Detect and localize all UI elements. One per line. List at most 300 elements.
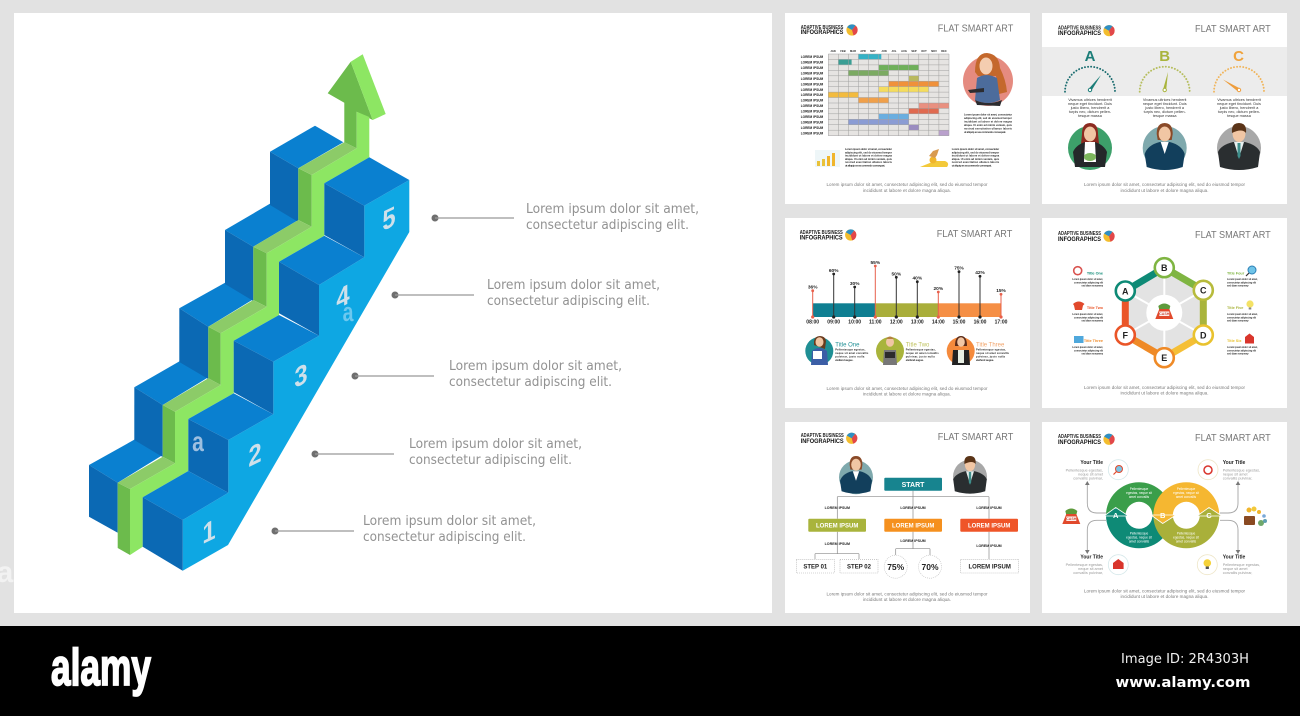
timeline chart: 50% <box>891 271 902 277</box>
title one text: pulvinar, justo nulla <box>835 354 865 358</box>
timeline chart: 09:00 <box>827 320 840 326</box>
item: title three: Title Three <box>1084 339 1103 343</box>
item: title four: Lorem ipsum dolor sit amet, <box>1227 278 1258 281</box>
title two text: neque sit amet convallis <box>906 351 939 355</box>
item: bottom right <box>1197 554 1260 575</box>
gantt chart: JUN <box>881 49 887 53</box>
step numbers: 2 <box>248 435 262 473</box>
timeline chart: 42% <box>975 270 986 276</box>
item: top left: Pellentesque egestas, <box>1066 468 1103 472</box>
item: title five <box>1227 300 1258 323</box>
gauge text A <box>1068 98 1113 118</box>
timeline chart <box>806 260 1008 326</box>
timeline chart: 36% <box>808 284 818 290</box>
back row of steps <box>89 126 343 533</box>
step numbers: 3 <box>294 356 308 394</box>
title two text <box>906 342 939 362</box>
connector lines <box>815 491 989 559</box>
timeline chart: 30% <box>850 281 860 287</box>
step 2 <box>188 393 273 493</box>
person: title one <box>805 336 833 365</box>
footer text <box>826 386 988 396</box>
ring diagram: C <box>1206 511 1212 520</box>
item: bottom right: Pellentesque egestas, <box>1223 563 1260 567</box>
ring diagram: egestas, neque sit <box>1173 491 1199 495</box>
light side face of stairs <box>183 180 409 571</box>
step 02: STEP 02 <box>847 564 872 570</box>
gantt chart: LOREM IPSUM <box>801 77 824 81</box>
title three text: pulvinar, justo nulla <box>976 354 1006 358</box>
hexagon diagram <box>1116 258 1213 367</box>
item: title five: Title Five <box>1227 306 1243 310</box>
faint marks: a <box>343 297 354 327</box>
step 01: STEP 01 <box>803 564 828 570</box>
title two text: Title Two <box>906 342 930 348</box>
gantt chart: NOV <box>931 49 937 53</box>
footer text: incididunt ut labore et dolore magna aliqua. <box>1120 188 1208 193</box>
step numbers <box>202 199 396 550</box>
text block: incididunt ut labore et dolore magna <box>952 154 1000 158</box>
item: top left: Your Title <box>1080 460 1103 466</box>
step numbers: 1 <box>202 512 216 550</box>
gantt chart: LOREM IPSUM <box>801 115 824 119</box>
item: bottom left <box>1066 554 1128 575</box>
ring diagram: Pellentesque <box>1130 532 1148 536</box>
panel: main stair infographic <box>0 13 772 613</box>
header: ADAPTIVE BUSINESS <box>801 25 844 31</box>
footer text <box>1084 588 1246 599</box>
ring diagram: amet convallis <box>1176 495 1197 499</box>
lorem box <box>961 559 1019 573</box>
timeline chart: 10:00 <box>848 320 861 326</box>
gantt chart: LOREM IPSUM <box>801 82 824 86</box>
text block: nostrud exercitation ullamco laboris <box>845 160 893 164</box>
callout 4 <box>392 277 660 309</box>
hexagon diagram: C <box>1200 286 1207 296</box>
header <box>1058 433 1271 446</box>
text block: adipiscing elit, sed do eiusmod tempor <box>845 150 892 154</box>
box: orange: LOREM IPSUM <box>892 523 934 529</box>
icon: growth bar chart <box>815 150 840 167</box>
timeline chart: 13:00 <box>911 320 924 326</box>
header: ADAPTIVE BUSINESS <box>1058 231 1102 237</box>
item: bottom left: Your Title <box>1080 554 1103 560</box>
hexagon diagram: D <box>1200 330 1207 340</box>
gauge C <box>1214 48 1264 92</box>
green arrow path <box>118 54 386 555</box>
connector labels: LOREM IPSUM <box>900 506 926 510</box>
item: bottom right: convallis pulvinar, <box>1223 571 1252 575</box>
text block: nostrud exercitation ullamco laboris <box>952 160 1000 164</box>
title three text: eleifend augue. <box>976 358 994 362</box>
text block: Lorem ipsum dolor sit amet, consectetur <box>845 147 892 151</box>
panel: org chart <box>785 422 1030 613</box>
header: FLAT SMART ART <box>1195 24 1271 35</box>
gantt chart <box>801 49 949 136</box>
gantt chart: LOREM IPSUM <box>801 61 824 65</box>
header <box>1058 24 1271 37</box>
title one text: eleifend augue. <box>835 358 854 362</box>
item: top right: neque sit amet <box>1223 472 1249 476</box>
connector labels <box>825 506 1002 548</box>
callout 1 <box>272 513 536 545</box>
footer text: incididunt ut labore et dolore magna aliqua. <box>863 392 951 396</box>
hexagon diagram: E <box>1161 353 1167 363</box>
callout 4: Lorem ipsum dolor sit amet, <box>487 277 660 293</box>
ring diagram: Pellentesque <box>1177 487 1195 491</box>
gantt chart: JAN <box>830 49 836 53</box>
person: woman teal <box>1143 123 1187 170</box>
item: top right: Your Title <box>1223 460 1246 466</box>
item: title two: sed diam nonummy <box>1081 321 1104 323</box>
gantt chart: LOREM IPSUM <box>801 110 824 114</box>
timeline chart: 15:00 <box>953 320 966 326</box>
gantt chart: DEC <box>941 49 947 53</box>
title one text: Title One <box>835 342 860 348</box>
panel: interlocked rings <box>1042 422 1287 613</box>
step 1 <box>143 471 228 571</box>
gauge text A: turpis nec, dictum pellen- <box>1069 110 1112 114</box>
gantt chart: LOREM IPSUM <box>801 126 824 130</box>
title one text <box>835 342 869 362</box>
icon: coins and figure <box>920 149 948 167</box>
alamy logo: alamy <box>51 639 151 697</box>
ring diagram <box>1104 482 1222 548</box>
item: bottom right: neque sit amet <box>1223 567 1249 571</box>
item: top right <box>1198 460 1260 480</box>
percent 70: 70% <box>921 562 939 572</box>
icon: cash bag <box>1062 508 1080 524</box>
callout 4: consectetur adipiscing elit. <box>487 293 650 309</box>
header: ADAPTIVE BUSINESS <box>1058 26 1102 32</box>
text block <box>845 147 893 168</box>
gauge text B: turpis nec, dictum pellen- <box>1144 110 1187 114</box>
side text: incididunt ut labore et dolore magna <box>964 120 1013 124</box>
grey band <box>1042 47 1287 96</box>
title two text: pulvinar, justo nulla <box>906 354 935 358</box>
gantt chart: LOREM IPSUM <box>801 71 824 75</box>
timeline chart: 11:00 <box>869 320 882 326</box>
gauge A: A <box>1085 48 1096 65</box>
ring diagram: egestas, neque sit <box>1126 536 1152 540</box>
item: bottom right: Your Title <box>1223 554 1246 560</box>
timeline chart: 14:00 <box>932 320 945 326</box>
panel: hexagon cycle <box>1042 218 1287 408</box>
connector labels: LOREM IPSUM <box>900 539 926 543</box>
callout 5: Lorem ipsum dolor sit amet, <box>526 201 699 217</box>
header: INFOGRAPHICS <box>1058 236 1101 243</box>
text block: aliqua. Ut enim ad minim veniam, quis <box>952 157 1000 161</box>
gauge text C: neque eget tincidunt. Duis <box>1217 102 1261 106</box>
item: title four: consectetur adipiscing elit <box>1227 281 1256 284</box>
item: title five: consectetur adipiscing elit <box>1227 316 1256 319</box>
box: red: LOREM IPSUM <box>968 523 1010 529</box>
ring diagram: B <box>1160 511 1166 520</box>
ring diagram: amet convallis <box>1129 540 1150 544</box>
footer text <box>1084 385 1246 396</box>
step 01 <box>796 559 834 573</box>
item: title six: Lorem ipsum dolor sit amet, <box>1227 346 1258 349</box>
person: man grey <box>1217 123 1261 170</box>
title three text <box>976 342 1010 362</box>
connector labels: LOREM IPSUM <box>825 542 850 546</box>
watermark bar <box>0 626 1300 716</box>
callout 2: consectetur adipiscing elit. <box>409 452 572 468</box>
footer text <box>826 592 988 602</box>
footer text: incididunt ut labore et dolore magna aliqua. <box>863 597 951 602</box>
item: title four: Title Four <box>1227 272 1245 276</box>
gauge text B: tesque massa <box>1153 114 1177 118</box>
ring diagram: Pellentesque <box>1130 487 1148 491</box>
lorem box: LOREM IPSUM <box>969 564 1011 570</box>
percent 70 <box>918 555 942 578</box>
ring diagram: amet convallis <box>1129 495 1150 499</box>
footer text: Lorem ipsum dolor sit amet, consectetur adipiscing elit, sed do eiusmod tempor <box>826 182 988 187</box>
footer text: incididunt ut labore et dolore magna aliqua. <box>863 188 951 193</box>
title two text: eleifend augue. <box>906 358 924 362</box>
side text: ut aliquip ex ea commodo consequat. <box>964 130 1006 134</box>
ring diagram: egestas, neque sit <box>1173 536 1199 540</box>
header: INFOGRAPHICS <box>801 29 843 36</box>
panel: gantt chart <box>785 13 1030 204</box>
gauge text C: justo libero, hendrerit a <box>1219 106 1259 110</box>
text block: Lorem ipsum dolor sit amet, consectetur <box>952 147 999 151</box>
gantt chart: MAR <box>850 49 856 53</box>
callout 3: Lorem ipsum dolor sit amet, <box>449 358 622 374</box>
timeline chart: 12:00 <box>890 320 903 326</box>
header <box>801 432 1013 445</box>
gantt chart: JUL <box>892 49 897 53</box>
title one text: Pellentesque egestas, <box>835 348 866 352</box>
timeline chart: 55% <box>870 260 881 266</box>
gauge text C: turpis nec, dictum pellen- <box>1218 110 1261 114</box>
callout 2: Lorem ipsum dolor sit amet, <box>409 436 582 452</box>
item: title one: Title One <box>1087 272 1103 276</box>
header: FLAT SMART ART <box>1195 433 1271 444</box>
gauge text B: neque eget tincidunt. Duis <box>1143 102 1187 106</box>
connector labels: LOREM IPSUM <box>976 544 1002 548</box>
gauge text A: justo libero, hendrerit a <box>1070 106 1110 110</box>
step 3 <box>234 315 319 414</box>
ring diagram: Pellentesque <box>1177 532 1195 536</box>
item: top left: convallis pulvinar, <box>1073 476 1103 480</box>
header: FLAT SMART ART <box>938 23 1013 34</box>
timeline chart: 75% <box>954 266 965 272</box>
start box <box>884 478 942 491</box>
header: ADAPTIVE BUSINESS <box>801 433 844 439</box>
callout 3: consectetur adipiscing elit. <box>449 374 612 390</box>
item: top right: Pellentesque egestas, <box>1223 468 1260 472</box>
footer text: Lorem ipsum dolor sit amet, consectetur adipiscing elit, sed do eiusmod tempor <box>1084 385 1246 390</box>
gauge text C <box>1217 98 1262 118</box>
connector labels: LOREM IPSUM <box>976 506 1002 510</box>
step numbers: 4 <box>336 277 350 315</box>
side text <box>964 112 1013 134</box>
footer text <box>1084 182 1246 193</box>
item: title two <box>1072 302 1104 323</box>
website: www.alamy.com <box>1116 675 1250 691</box>
header <box>801 23 1013 36</box>
footer text: Lorem ipsum dolor sit amet, consectetur adipiscing elit, sed do eiusmod tempor <box>1084 588 1246 594</box>
item: top left: neque sit amet <box>1078 472 1104 476</box>
title three text: Pellentesque egestas, <box>976 348 1006 352</box>
item: title two: Title Two <box>1087 306 1104 310</box>
gantt chart: APR <box>860 49 866 53</box>
gantt chart: LOREM IPSUM <box>801 104 824 108</box>
panel: gauges <box>1042 13 1287 204</box>
item: title six: Title Six <box>1227 339 1242 343</box>
ring diagram: amet convallis <box>1176 540 1197 544</box>
item: title four <box>1227 266 1258 288</box>
connector arrows <box>1085 481 1240 554</box>
gauge B: B <box>1159 48 1170 65</box>
side text: Lorem ipsum dolor sit amet, consectetur <box>964 112 1012 116</box>
footer text: incididunt ut labore et dolore magna aliqua. <box>1120 594 1208 599</box>
header: INFOGRAPHICS <box>800 234 843 242</box>
gauge B <box>1140 48 1190 92</box>
connector labels: LOREM IPSUM <box>825 506 850 510</box>
title two text: Pellentesque egestas, <box>906 348 936 352</box>
gauge text B: Vivamus ultrices hendrerit <box>1143 98 1187 102</box>
gauge C: C <box>1233 48 1244 65</box>
step 4 <box>279 236 364 336</box>
timeline chart: 20% <box>933 286 944 292</box>
gantt chart: LOREM IPSUM <box>801 66 824 70</box>
item: title three: consectetur adipiscing elit <box>1074 349 1103 352</box>
header: ADAPTIVE BUSINESS <box>1058 434 1102 440</box>
item: top left <box>1066 460 1128 480</box>
item: bottom left: convallis pulvinar, <box>1073 571 1103 575</box>
footer text: Lorem ipsum dolor sit amet, consectetur adipiscing elit, sed do eiusmod tempor <box>826 592 988 596</box>
item: title five: sed diam nonummy <box>1227 321 1249 323</box>
header: INFOGRAPHICS <box>801 438 844 445</box>
item: title one <box>1072 267 1104 288</box>
footer text: incididunt ut labore et dolore magna aliqua. <box>1120 391 1208 396</box>
item: title four: sed diam nonummy <box>1227 286 1249 288</box>
text block: aliqua. Ut enim ad minim veniam, quis <box>845 157 893 161</box>
hexagon diagram: B <box>1161 263 1168 273</box>
timeline chart: 60% <box>829 268 839 274</box>
title three text: Title Three <box>976 342 1005 348</box>
gantt chart: LOREM IPSUM <box>801 131 824 135</box>
callout 2 <box>312 436 582 468</box>
callout 3 <box>352 358 622 390</box>
person: woman <box>839 456 873 494</box>
gantt chart: SEP <box>911 49 917 53</box>
item: title two: consectetur adipiscing elit <box>1074 316 1103 319</box>
header: FLAT SMART ART <box>938 432 1013 443</box>
callout 1: Lorem ipsum dolor sit amet, <box>363 513 536 529</box>
icon: wallet and coins <box>1244 506 1267 526</box>
box: red <box>960 519 1018 532</box>
ring diagram: A <box>1113 511 1119 520</box>
callout 1: consectetur adipiscing elit. <box>363 529 526 545</box>
gauge text A: tesque massa <box>1078 114 1103 118</box>
timeline chart: 15% <box>996 288 1007 294</box>
step 02 <box>840 559 878 573</box>
ring diagram: egestas, neque sit <box>1126 491 1152 495</box>
start box: START <box>902 482 925 489</box>
footer text <box>826 182 988 193</box>
side text: adipiscing elit, sed do eiusmod tempor <box>964 116 1012 120</box>
side text: nostrud exercitation ullamco laboris <box>964 126 1013 130</box>
side text: aliqua. Ut enim ad minim veniam, quis <box>964 123 1013 127</box>
header <box>800 229 1012 242</box>
gantt chart: LOREM IPSUM <box>801 99 824 103</box>
header: INFOGRAPHICS <box>1058 30 1101 37</box>
callout 5: consectetur adipiscing elit. <box>526 217 689 233</box>
gantt chart: LOREM IPSUM <box>801 120 824 124</box>
text block: incididunt ut labore et dolore magna <box>845 154 893 158</box>
gauge text C: Vivamus ultrices hendrerit <box>1217 98 1262 102</box>
gauge A <box>1065 48 1115 92</box>
gantt chart: MAY <box>870 49 876 53</box>
box: olive: LOREM IPSUM <box>816 523 858 529</box>
header: ADAPTIVE BUSINESS <box>800 230 843 236</box>
gauge text B: justo libero, hendrerit a <box>1144 106 1185 110</box>
item: title six: sed diam nonummy <box>1227 354 1249 356</box>
person: man <box>953 456 987 494</box>
header: INFOGRAPHICS <box>1058 439 1101 446</box>
item: title five: Lorem ipsum dolor sit amet, <box>1227 313 1258 316</box>
hexagon diagram: F <box>1123 330 1129 340</box>
item: title six <box>1227 334 1258 356</box>
item: bottom left: Pellentesque egestas, <box>1066 563 1103 567</box>
text block: ut aliquip ex ea commodo consequat. <box>952 164 992 168</box>
percent 75: 75% <box>887 562 905 572</box>
gantt chart: OCT <box>921 49 927 53</box>
faint marks <box>0 297 354 589</box>
title three text: neque sit amet convallis <box>976 351 1010 355</box>
timeline chart: 08:00 <box>806 320 819 326</box>
isometric staircase <box>0 54 409 589</box>
timeline chart: 40% <box>912 276 923 282</box>
image id: Image ID: 2R4303H <box>1121 651 1249 667</box>
gantt chart: LOREM IPSUM <box>801 55 824 59</box>
callout 5 <box>432 201 699 233</box>
timeline chart: 16:00 <box>974 320 987 326</box>
item: title three: Lorem ipsum dolor sit amet, <box>1072 346 1103 349</box>
gantt chart: FEB <box>840 49 846 53</box>
gantt chart: LOREM IPSUM <box>801 88 824 92</box>
step 5 <box>324 157 409 257</box>
footer text: Lorem ipsum dolor sit amet, consectetur adipiscing elit, sed do eiusmod tempor <box>826 386 988 391</box>
item: title six: consectetur adipiscing elit <box>1227 349 1256 352</box>
person: title two <box>876 336 904 365</box>
item: title one: consectetur adipiscing elit <box>1074 281 1103 284</box>
item: top right: convallis pulvinar, <box>1223 476 1252 480</box>
gauge text B <box>1143 98 1187 118</box>
panel: timeline <box>785 218 1030 408</box>
item: title three: sed diam nonummy <box>1081 354 1104 356</box>
gauge text A: Vivamus ultrices hendrerit <box>1068 98 1113 102</box>
person with notebook <box>963 53 1013 106</box>
item: title one: Lorem ipsum dolor sit amet, <box>1072 278 1103 281</box>
gantt chart: AUG <box>901 49 907 53</box>
person: title three <box>947 336 975 365</box>
header: FLAT SMART ART <box>937 229 1012 240</box>
faint marks: a <box>192 427 204 458</box>
header: FLAT SMART ART <box>1195 230 1271 241</box>
text block: adipiscing elit, sed do eiusmod tempor <box>952 150 999 154</box>
text block: ut aliquip ex ea commodo consequat. <box>845 164 885 168</box>
box: orange <box>884 519 942 532</box>
gauge text A: neque eget tincidunt. Duis <box>1068 102 1112 106</box>
person: woman green <box>1068 123 1112 170</box>
item: title one: sed diam nonummy <box>1081 286 1104 288</box>
step numbers: 5 <box>382 199 396 237</box>
item: bottom left: neque sit amet <box>1078 567 1104 571</box>
